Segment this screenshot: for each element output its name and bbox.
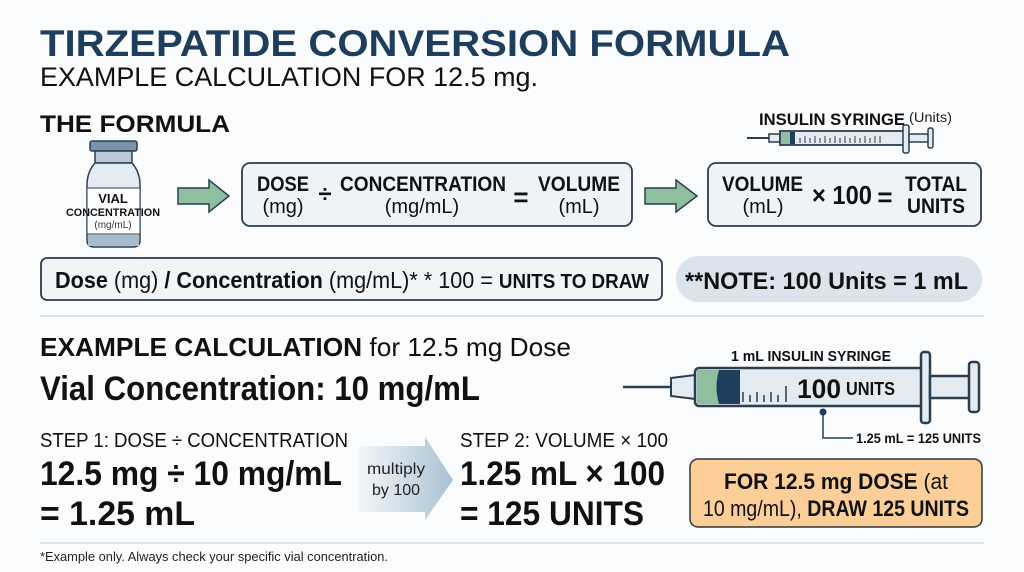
formula box: volume x 100 = total units: UNITS	[907, 195, 965, 218]
arrow: multiply by 100	[358, 437, 453, 520]
step 1: = 1.25 mL	[40, 495, 195, 533]
footnote: *Example only. Always check your specific vial concentration.	[40, 549, 388, 564]
step 2: STEP 2: VOLUME × 100	[460, 430, 668, 452]
callout: 1.25 mL = 125 units	[820, 408, 981, 446]
vial concentration: Vial Concentration: 10 mg/mL	[40, 370, 480, 408]
icon: 1 mL insulin syringe: UNITS	[846, 379, 895, 399]
icon: vial	[66, 141, 160, 247]
arrow 1	[178, 180, 229, 212]
icon: vial: VIAL	[98, 191, 128, 206]
icon: vial: CONCENTRATION	[66, 207, 160, 219]
step 2: 1.25 mL × 100	[460, 455, 665, 493]
title: TIRZEPATIDE CONVERSION FORMULA	[40, 23, 790, 64]
formula box: dose / concentration = volume: CONCENTRATION	[340, 173, 506, 196]
step 1: STEP 1: DOSE ÷ CONCENTRATION	[40, 430, 348, 452]
formula summary box: Dose (mg) / Concentration (mg/mL)* * 100 = UNITS TO DRAW	[55, 267, 649, 293]
step 1	[40, 430, 348, 533]
note pill	[676, 256, 982, 302]
icon: 1 mL insulin syringe: 100	[797, 374, 841, 404]
subtitle: EXAMPLE CALCULATION FOR 12.5 mg.	[40, 62, 538, 92]
formula box: volume x 100 = total units: =	[877, 182, 893, 212]
result box: FOR 12.5 mg DOSE (at	[724, 469, 948, 494]
icon: small insulin syringe: (Units)	[909, 109, 952, 125]
result box	[690, 459, 982, 527]
formula box: volume x 100 = total units: × 100	[812, 180, 872, 210]
arrow: multiply by 100: multiply	[367, 461, 425, 478]
step 2: = 125 UNITS	[460, 495, 644, 533]
icon: 1 mL insulin syringe	[623, 348, 979, 423]
heading: the formula: THE FORMULA	[40, 111, 230, 138]
formula box: dose / concentration = volume: (mg)	[262, 196, 304, 218]
callout: 1.25 mL = 125 units: 1.25 mL = 125 UNITS	[856, 431, 981, 446]
formula box: dose / concentration = volume: (mg/mL)	[385, 196, 459, 218]
formula box: volume x 100 = total units: VOLUME	[722, 173, 803, 196]
step 2	[460, 430, 668, 533]
icon: 1 mL insulin syringe: 1 mL INSULIN SYRINGE	[731, 348, 891, 365]
formula box: volume x 100 = total units: (mL)	[742, 196, 784, 218]
formula box: volume x 100 = total units	[708, 163, 981, 226]
formula box: dose / concentration = volume: VOLUME	[538, 173, 620, 196]
icon: small insulin syringe	[747, 109, 952, 153]
formula box: dose / concentration = volume	[242, 163, 632, 226]
step 1: 12.5 mg ÷ 10 mg/mL	[40, 455, 342, 493]
formula box: dose / concentration = volume: DOSE	[257, 173, 309, 196]
formula box: volume x 100 = total units: TOTAL	[905, 173, 967, 196]
arrow: multiply by 100: by 100	[372, 482, 420, 499]
arrow 2	[645, 180, 697, 212]
formula summary box	[41, 258, 662, 300]
result box: 10 mg/mL), DRAW 125 UNITS	[703, 496, 969, 521]
formula box: dose / concentration = volume: (mL)	[558, 196, 600, 218]
note pill: **NOTE: 100 Units = 1 mL	[685, 268, 968, 295]
heading: example calculation: EXAMPLE CALCULATION for 12.5 mg Dose	[40, 332, 571, 362]
icon: small insulin syringe: INSULIN SYRINGE	[759, 110, 905, 129]
formula box: dose / concentration = volume: =	[513, 182, 529, 212]
icon: vial: (mg/mL)	[94, 220, 132, 231]
formula box: dose / concentration = volume: ÷	[318, 181, 332, 208]
